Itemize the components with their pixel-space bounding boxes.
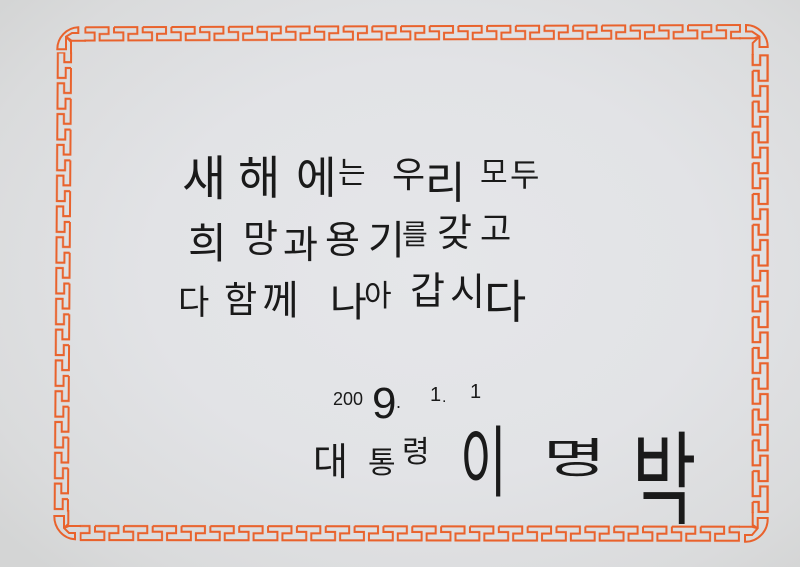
message line 3: 다 [484,276,526,328]
date: 2009. 1. 1: . [442,389,446,406]
message line 3: 시 [450,272,485,314]
message line 2: 를 [402,219,428,250]
signature: name syllable 이: 이 [460,419,507,507]
date: 2009. 1. 1: 1 [470,381,481,403]
signature: title 대통령: 령 [402,436,430,469]
date: 2009. 1. 1: 1 [430,384,441,406]
border: bottom band [80,524,740,544]
border: bottom-left corner [54,510,81,539]
message: handwritten greeting [178,152,539,328]
border: top band [84,23,741,43]
message line 2: 갖 [437,213,472,255]
message line 1: 모 [480,157,508,190]
message line 3: 나 [330,281,367,325]
border: bottom-right corner [739,512,768,542]
message line 3: 함 [224,279,257,320]
date: 2009. 1. 1: . [396,392,401,412]
signature: title and name [313,419,696,538]
message line 3: 께 [262,279,299,323]
message line 2: 기 [368,219,405,263]
message line 2: 고 [480,211,511,249]
message line 2: 과 [283,225,318,267]
signature: name syllable 명: 명 [543,436,606,483]
signature: title 대통령: 대 [313,442,348,484]
signature: title 대통령: 통 [368,447,396,480]
message line 2: 용 [325,220,360,262]
date: 2009. 1. 1: 9 [372,379,396,428]
message line 1: 우 [392,154,425,195]
date: 2009. 1. 1: 200 [333,389,363,409]
message line 3: 아 [364,280,392,313]
message line 1: 새 [182,153,226,206]
border: left band [52,52,73,512]
message line 3: 갑 [410,271,445,313]
border: right band [750,54,771,513]
border: top-left corner [57,27,86,54]
message line 2: 망 [243,219,278,261]
border: top-right corner [739,25,768,55]
message line 1: 두 [510,157,539,193]
message line 1: 는 [338,157,366,190]
message line 1: 해 [238,152,280,204]
message line 1: 리 [425,159,465,208]
signature: name syllable 박: 박 [632,425,696,538]
message line 1: 에 [296,154,336,203]
message line 3: 다 [178,284,209,322]
message line 2: 희 [188,220,227,267]
